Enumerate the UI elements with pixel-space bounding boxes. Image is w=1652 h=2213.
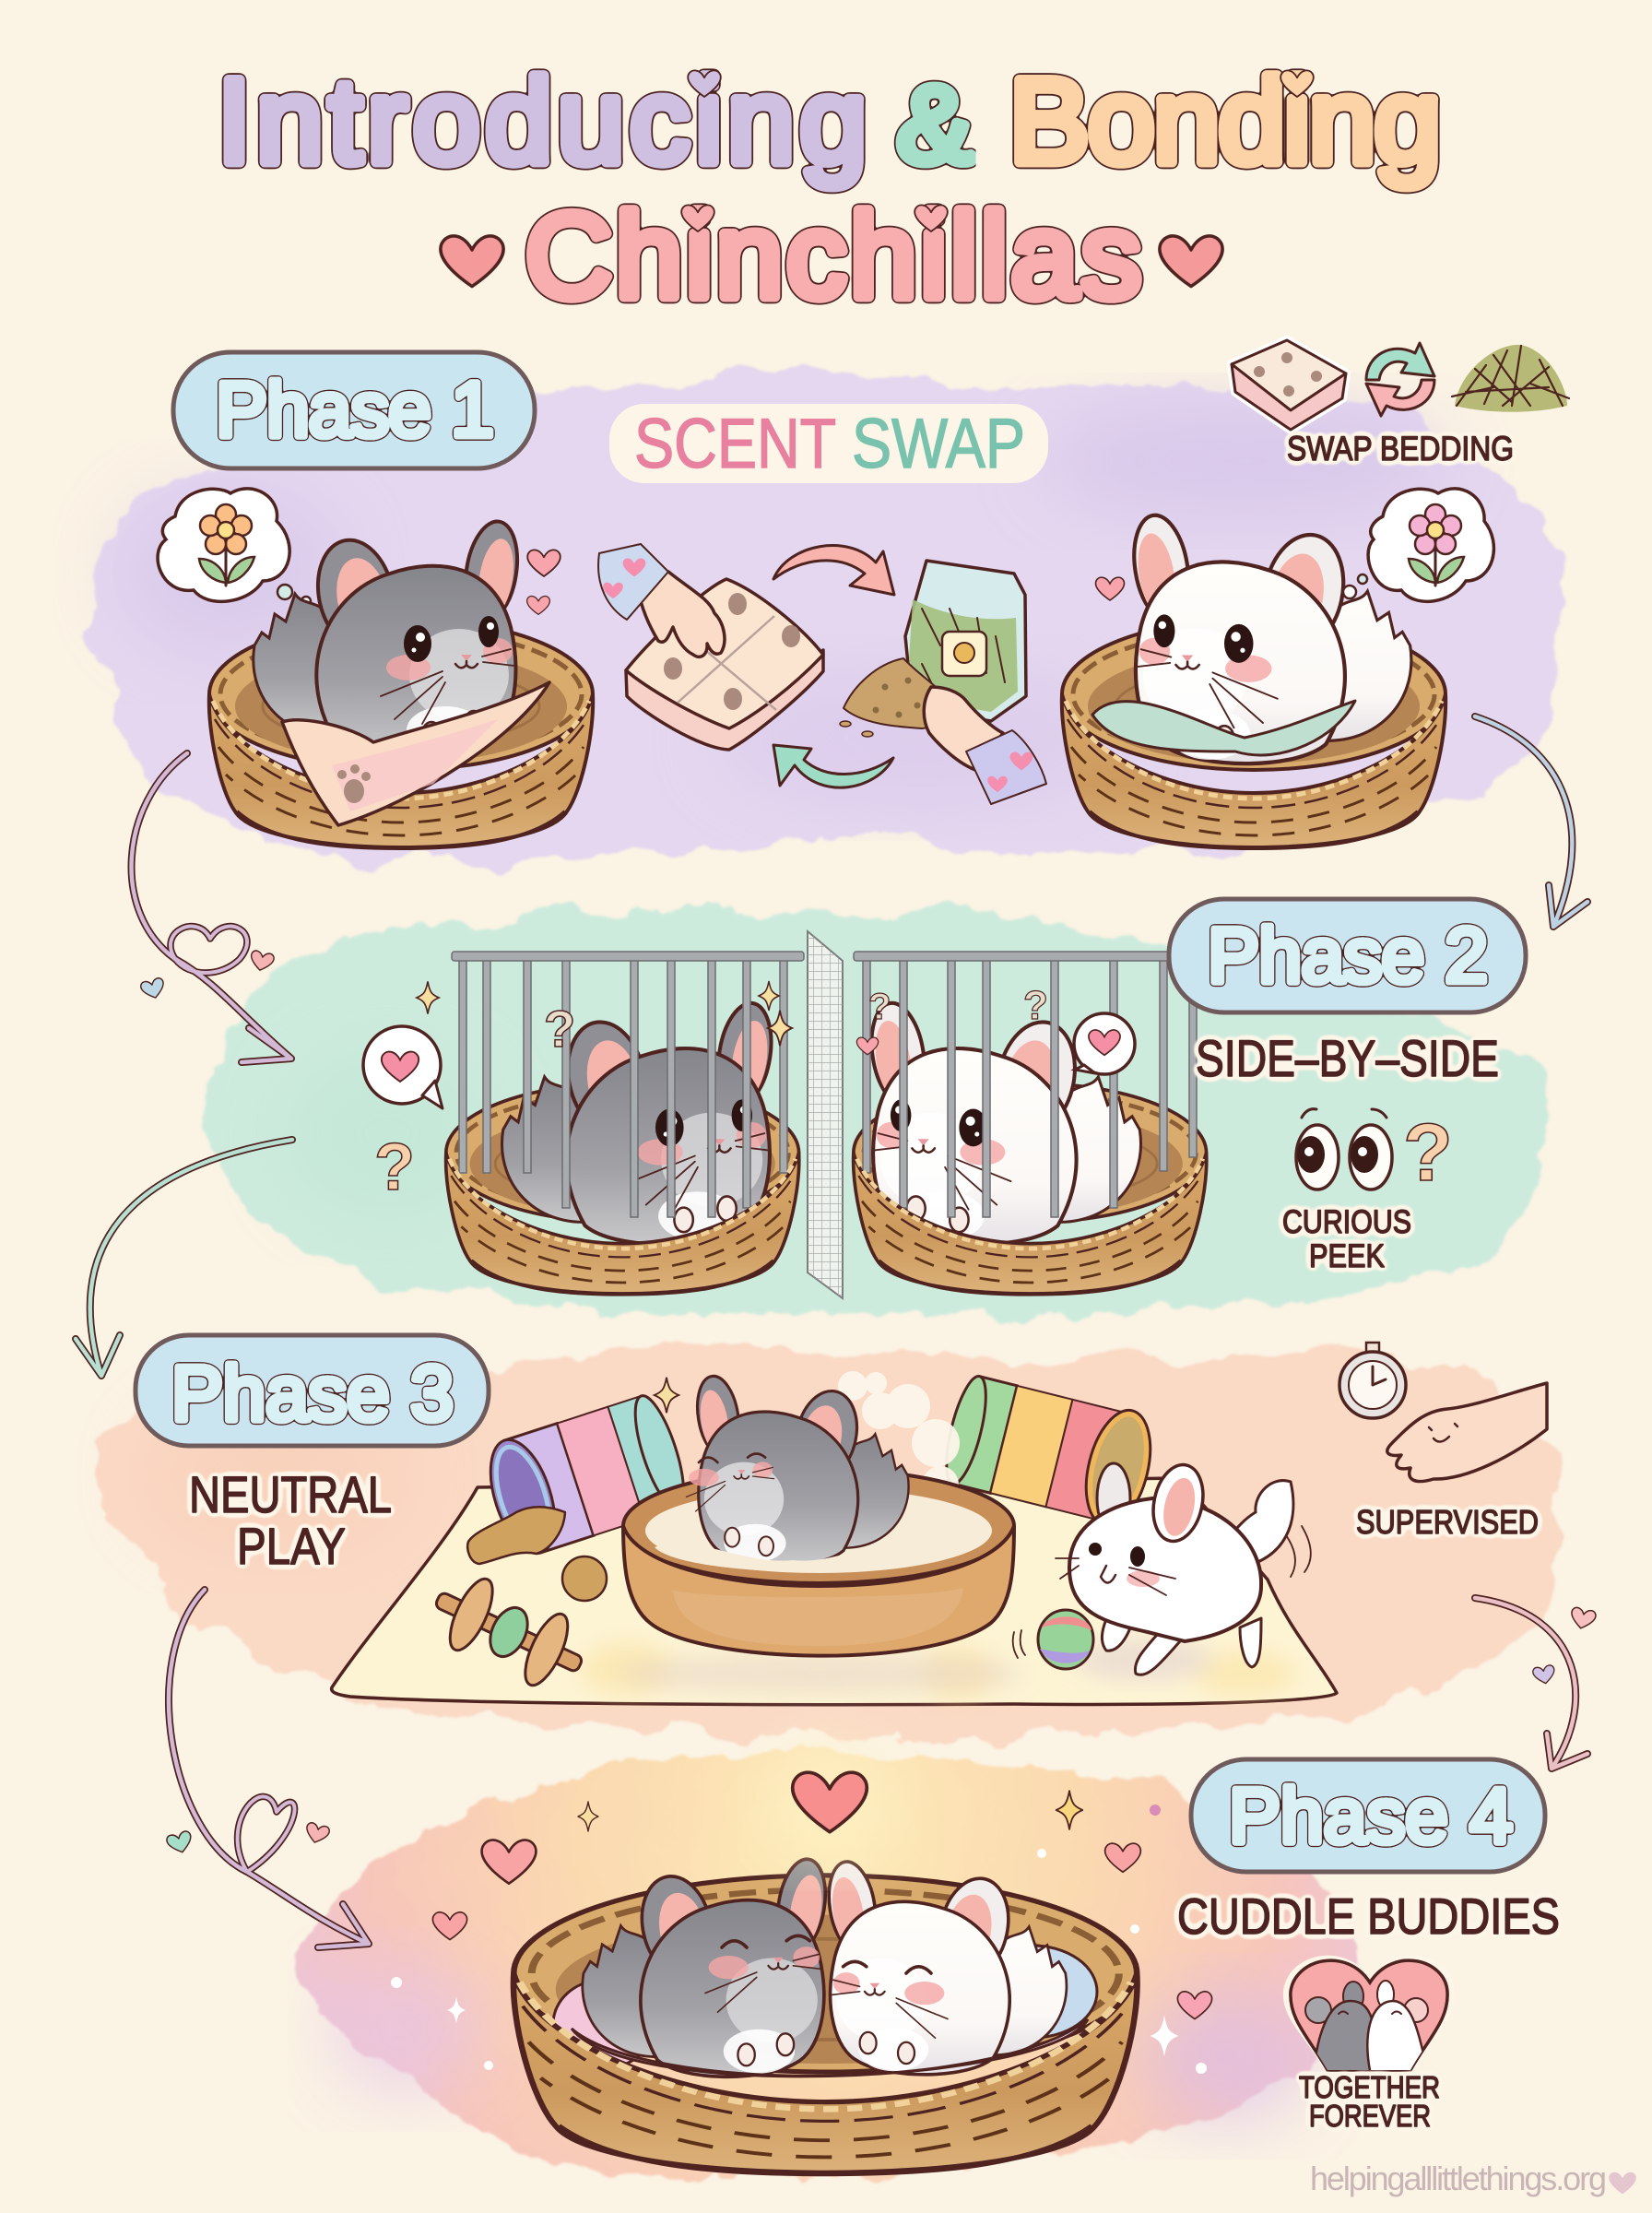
phase 3 badge: Phase 3: [171, 1350, 454, 1437]
basket front: [572, 2019, 1088, 2077]
phase 2 badge: [1169, 899, 1526, 1012]
thought cloud: pink flower: [1343, 489, 1493, 601]
small heart, phase 1 right: [1096, 577, 1124, 600]
curious peek label: PEEK: [1309, 1238, 1385, 1274]
phase 1 badge: Phase 1: [216, 366, 494, 453]
phase 3 badge: [136, 1335, 489, 1446]
basket and grey chinchilla, phase 1: [209, 517, 593, 848]
grey chinchilla: [583, 1856, 832, 2077]
arrow: phase 3 right to phase 4 badge: [1475, 1598, 1597, 1769]
hand and cuff: [636, 572, 725, 657]
question marks and sparkles: ?: [374, 1130, 415, 1204]
question marks and sparkles: ?: [868, 987, 891, 1027]
icon: curious eyes: [1296, 1106, 1453, 1198]
question marks and sparkles: ?: [544, 1000, 575, 1058]
pellet pile: [844, 658, 946, 728]
arrow: phase 3 to phase 4: [166, 1590, 369, 1947]
curious peek label: [1282, 1204, 1411, 1274]
hand and cuff: [924, 687, 1003, 770]
tube left: [478, 1391, 693, 1561]
icon: open hand: [1387, 1383, 1547, 1482]
curious peek label: CURIOUS: [1282, 1204, 1411, 1240]
question marks and sparkles: ?: [1023, 983, 1048, 1028]
arrow: phase 1 right to phase 2 badge: [1475, 716, 1587, 927]
speech bubble heart left: [363, 1026, 442, 1108]
icon: curious eyes: ?: [1403, 1106, 1453, 1198]
arrow: phase 1 to phase 2: [132, 753, 291, 1062]
mesh divider: [808, 931, 843, 1298]
title word: Chinchillas: Chinchillas: [525, 188, 1141, 323]
panel: phase 3 wash: [100, 1350, 1563, 1734]
icon: stopwatch: [1339, 1343, 1406, 1418]
question marks and sparkles: [374, 981, 1048, 1204]
play mat: [332, 1478, 1337, 1705]
together forever label: FOREVER: [1309, 2099, 1431, 2133]
neutral play label: [189, 1465, 392, 1575]
phase 4 badge: [1191, 1759, 1545, 1872]
striped ball: [1038, 1610, 1093, 1669]
left basket back and grey chinchilla: [446, 1083, 799, 1223]
title word: Bonding: Bonding: [1009, 53, 1441, 188]
small hearts, phase 1 left: [527, 550, 560, 614]
title word: ampersand: &: [897, 65, 973, 186]
wooden chew toy: [421, 1564, 596, 1700]
sparkle near bowl: [655, 1378, 678, 1413]
cuddle buddies label: CUDDLE BUDDIES: [1177, 1888, 1560, 1945]
website credit: helpingalllittlethings.org: [1310, 2160, 1607, 2197]
phase 1 badge: [173, 352, 535, 468]
basket fronts: [446, 1153, 799, 1295]
phase 2 badge: Phase 2: [1208, 912, 1488, 999]
panel: phase 2 wash: [204, 912, 1550, 1315]
supervised label: SUPERVISED: [1356, 1503, 1539, 1541]
motion lines: [1013, 1526, 1311, 1658]
side by side label: SIDE–BY–SIDE: [1196, 1029, 1499, 1087]
green arrow, hay to bedding: [773, 745, 893, 787]
icon: swap bedding trio: [1232, 340, 1569, 430]
panel: phase 4 wash: [302, 1746, 1355, 2177]
white chinchilla running: [1056, 1461, 1293, 1675]
basket and white chinchilla, phase 1: [1062, 512, 1446, 848]
right basket back and white chinchilla: [854, 1083, 1207, 1223]
hearts and sparkles around cuddle: [391, 1742, 1212, 2074]
title: [218, 53, 1441, 323]
panel: phase 1 wash: [91, 372, 1563, 862]
together forever label: TOGETHER: [1299, 2070, 1440, 2104]
tube right: [938, 1369, 1162, 1533]
swap arrows: [1366, 343, 1434, 416]
sand bowl with grey chinchilla: [623, 1373, 1014, 1656]
thought cloud: orange flower: [158, 489, 311, 606]
together forever label: [1299, 2070, 1440, 2133]
hay bag and pellets with hand: [840, 561, 1046, 804]
pink blanket: [282, 682, 549, 825]
phase 2 cage scene: [446, 931, 1207, 1298]
hay pellet: [562, 1556, 607, 1601]
neutral play label: PLAY: [237, 1517, 346, 1575]
basket back: [513, 1876, 1137, 2072]
phase 4 badge: Phase 4: [1229, 1772, 1513, 1859]
green pillow: [1092, 701, 1355, 755]
scent swap label: SCENT SWAP: [634, 405, 1025, 483]
hay pile: [1452, 345, 1569, 412]
cushions: [553, 1980, 655, 2068]
neutral play label: NEUTRAL: [189, 1465, 392, 1523]
folded blanket with hand: [598, 544, 823, 750]
speech bubble heart right: [1074, 1013, 1135, 1074]
title word: Introducing: Introducing: [218, 53, 867, 188]
white chinchilla: [823, 1858, 1067, 2075]
dust cloud: [838, 1371, 960, 1503]
cage bars: [452, 952, 1197, 1217]
folded blanket: [1232, 340, 1346, 430]
phase 4 big basket with cuddling chinchillas: [513, 1856, 1138, 2174]
icon: heart with two chinchillas: [1283, 1956, 1455, 2077]
hay spill from tube: [467, 1507, 565, 1564]
title hearts: [441, 70, 1314, 287]
swap bedding label: SWAP BEDDING: [1287, 430, 1514, 467]
arrow: phase 2 to phase 3: [76, 1140, 292, 1376]
pink arrow, bedding to hay: [773, 546, 894, 595]
